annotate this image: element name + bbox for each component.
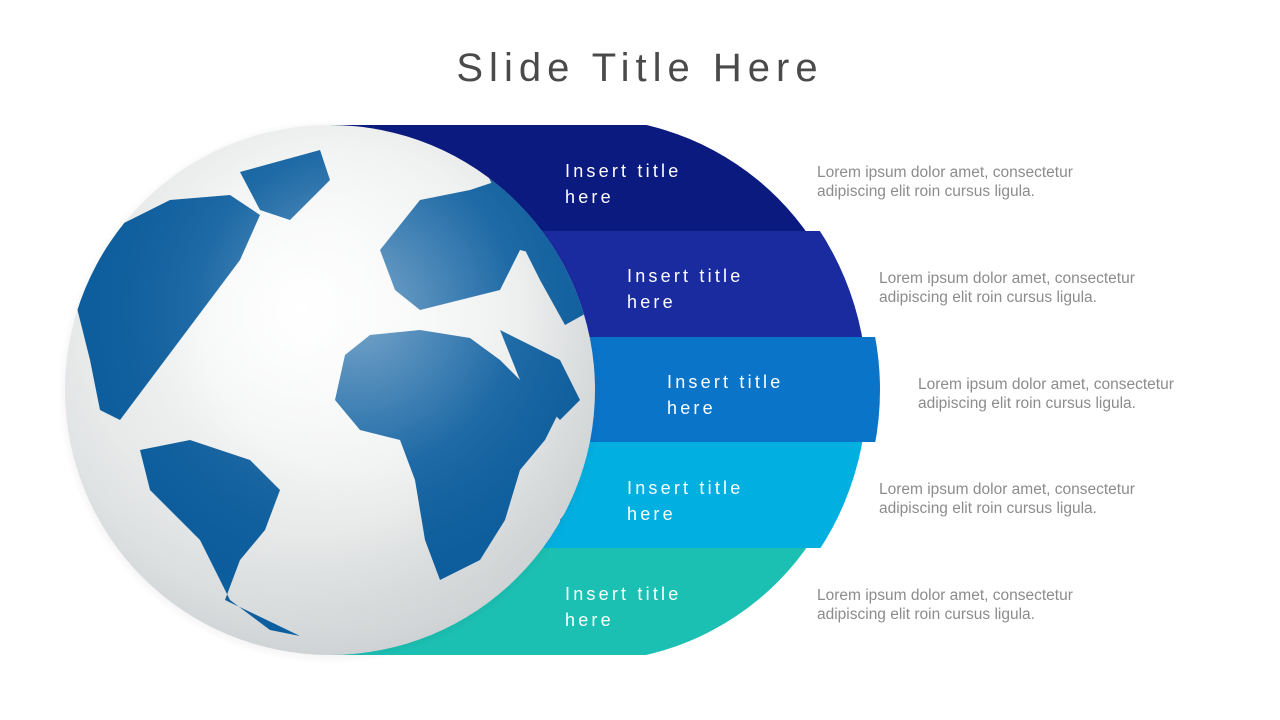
band 3 title: here — [667, 398, 716, 418]
band 1 title — [565, 161, 681, 207]
description 3: Lorem ipsum dolor amet, consectetur — [918, 376, 1174, 393]
description 1 — [817, 164, 1073, 200]
description 2 — [879, 270, 1135, 306]
band 5 title — [565, 584, 681, 630]
description 4 — [879, 481, 1135, 517]
description 5: adipiscing elit roin cursus ligula. — [817, 606, 1035, 623]
band 3 title: Insert title — [667, 372, 783, 392]
description 1: adipiscing elit roin cursus ligula. — [817, 183, 1035, 200]
description 3 — [918, 376, 1174, 412]
band 4 title — [627, 478, 743, 524]
band 4 — [542, 442, 862, 548]
band 1 title: Insert title — [565, 161, 681, 181]
band 5 title: Insert title — [565, 584, 681, 604]
band 2 title — [627, 266, 743, 312]
graphic: bands and globe — [65, 125, 880, 656]
band 2 title: here — [627, 292, 676, 312]
band 1 — [330, 125, 806, 231]
description 3: adipiscing elit roin cursus ligula. — [918, 395, 1136, 412]
band 5 — [331, 548, 806, 655]
band 2 — [542, 231, 862, 337]
title: Slide Title Here — [456, 46, 824, 90]
band 4 title: Insert title — [627, 478, 743, 498]
description 4: Lorem ipsum dolor amet, consectetur — [879, 481, 1135, 498]
description 5 — [817, 587, 1073, 623]
description 5: Lorem ipsum dolor amet, consectetur — [817, 587, 1073, 604]
band 2 title: Insert title — [627, 266, 743, 286]
description 2: adipiscing elit roin cursus ligula. — [879, 289, 1097, 306]
description 4: adipiscing elit roin cursus ligula. — [879, 500, 1097, 517]
band 4 title: here — [627, 504, 676, 524]
band 3 — [590, 337, 880, 442]
globe — [58, 120, 602, 664]
band 1 title: here — [565, 187, 614, 207]
description 2: Lorem ipsum dolor amet, consectetur — [879, 270, 1135, 287]
description 1: Lorem ipsum dolor amet, consectetur — [817, 164, 1073, 181]
band 3 title — [667, 372, 783, 418]
band 5 title: here — [565, 610, 614, 630]
